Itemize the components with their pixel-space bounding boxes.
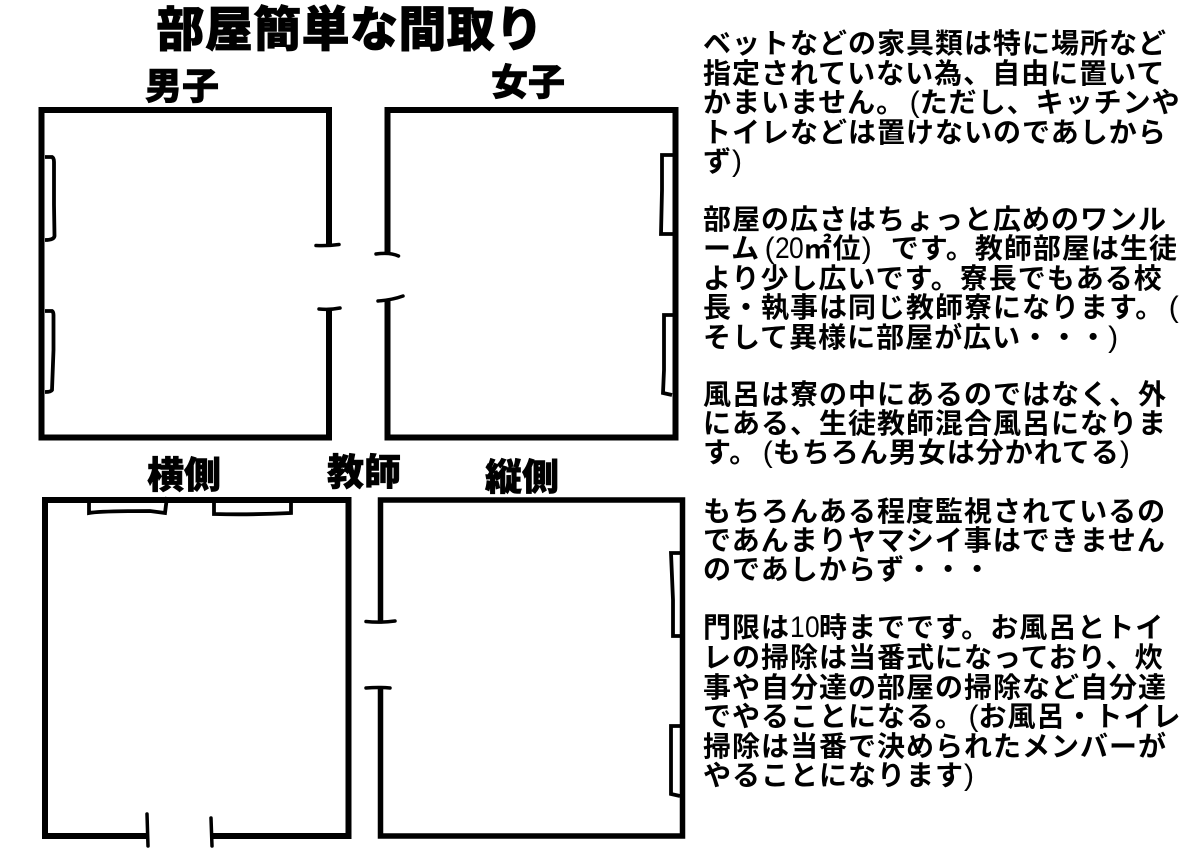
- text block: bath: (: [763, 436, 773, 469]
- heading: teachers: 教師: [327, 442, 401, 496]
- text block: furniture: かまいません。 ただし、キッチンや: [703, 81, 1181, 121]
- text block: curfew and cleaning: 門限は 時までです。お風呂とトイ: [703, 606, 1164, 646]
- heading: vertical side: 縦側: [485, 447, 559, 501]
- text block: bath: [703, 373, 1167, 471]
- text block: furniture: [703, 22, 1181, 180]
- text block: curfew and cleaning: ): [964, 759, 974, 792]
- text block: furniture: (: [910, 86, 920, 119]
- text block: curfew and cleaning: 0: [805, 611, 819, 644]
- text block: room size: [703, 198, 1179, 356]
- text block: bath: ): [1120, 436, 1130, 469]
- text block: room size: 0: [789, 232, 804, 265]
- text block: room size: (: [765, 232, 775, 265]
- text block: furniture: ベットなどの家具類は特に場所など: [703, 22, 1167, 62]
- text block: supervision: のであしからず・・・: [703, 548, 992, 588]
- text block: curfew and cleaning: レの掃除は当番式になっており、炊: [703, 636, 1164, 676]
- heading: boys: 男子: [145, 56, 219, 110]
- text block: furniture: 指定されていない為、自由に置いて: [703, 52, 1165, 92]
- heading: girls: 女子: [491, 52, 565, 106]
- text block: curfew and cleaning: 1: [790, 611, 805, 644]
- text block: furniture: トイレなどは置けないのであしから: [703, 111, 1167, 151]
- text block: curfew and cleaning: [703, 606, 1182, 794]
- floor plan: boys room: [42, 110, 340, 438]
- floor plan: teacher room vertical: [366, 500, 682, 836]
- text block: room size: ): [862, 232, 872, 265]
- text block: furniture: ): [732, 145, 742, 178]
- text block: bath: す。 もちろん男女は分かれてる: [703, 431, 1120, 471]
- text block: bath: 風呂は寮の中にあるのではなく、外: [703, 373, 1167, 413]
- text block: room size: そして異様に部屋が広い・・・: [703, 316, 1108, 356]
- text block: room size: ーム ㎡位 です。教師部屋は生徒: [703, 227, 1178, 267]
- text block: room size: 部屋の広さはちょっと広めのワンル: [703, 198, 1167, 238]
- text block: supervision: もちろんある程度監視されているの: [703, 490, 1166, 530]
- text block: curfew and cleaning: 事や自分達の部屋の掃除など自分達: [703, 666, 1167, 706]
- text block: curfew and cleaning: やることになります: [703, 754, 964, 794]
- text block: room size: 2: [775, 232, 789, 265]
- text block: room size: より少し広いです。寮長でもある校: [703, 257, 1163, 297]
- text block: furniture: ず: [703, 140, 732, 180]
- text block: supervision: であんまりヤマシイ事はできません: [703, 519, 1166, 559]
- heading: horizontal side: 横側: [147, 445, 221, 499]
- text block: room size: 長・執事は同じ教師寮になります。: [703, 286, 1164, 326]
- text block: curfew and cleaning: (: [969, 700, 979, 733]
- floor plan: teacher room horizontal: [45, 497, 348, 846]
- text block: bath: にある、生徒教師混合風呂になりま: [703, 402, 1167, 442]
- text block: curfew and cleaning: でやることになる。 お風呂・トイレ: [703, 695, 1182, 735]
- text block: supervision: [703, 490, 1166, 588]
- text block: room size: ): [1108, 321, 1118, 354]
- text block: room size: (: [1169, 291, 1179, 324]
- floor plan: girls room: [376, 110, 676, 438]
- text block: curfew and cleaning: 掃除は当番で決められたメンバーが: [703, 725, 1167, 765]
